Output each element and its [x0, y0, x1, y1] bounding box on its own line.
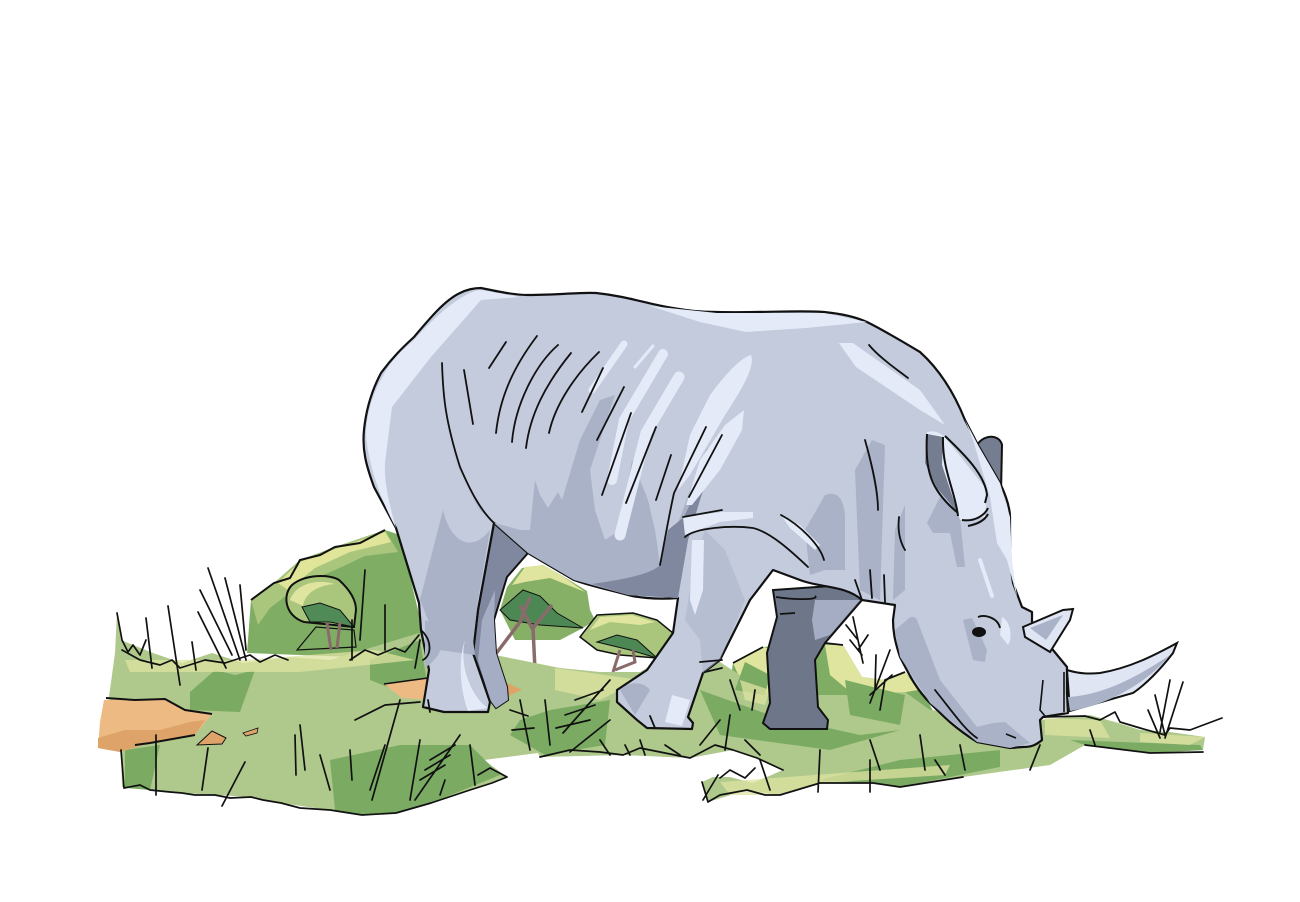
- face: eye and snout: [972, 616, 1064, 738]
- body shadows: [420, 395, 1030, 748]
- skin fold lines: [421, 336, 977, 738]
- highlight rib stripes: [592, 344, 992, 596]
- right background mound: [720, 643, 950, 745]
- soil patches: [98, 678, 522, 752]
- far front leg: [763, 585, 862, 729]
- far hind leg: [473, 523, 528, 708]
- rhino body: [363, 288, 1068, 748]
- grass blades: [117, 568, 1222, 815]
- far ear: [977, 437, 1002, 492]
- ground: grass patches: [109, 613, 1205, 815]
- horns: [1023, 609, 1177, 711]
- ear: [925, 431, 988, 526]
- background mid bush and trees: [495, 565, 673, 672]
- body highlights: [366, 290, 1017, 726]
- background hill with bush: [247, 530, 430, 660]
- darker underside shadow: [592, 435, 722, 598]
